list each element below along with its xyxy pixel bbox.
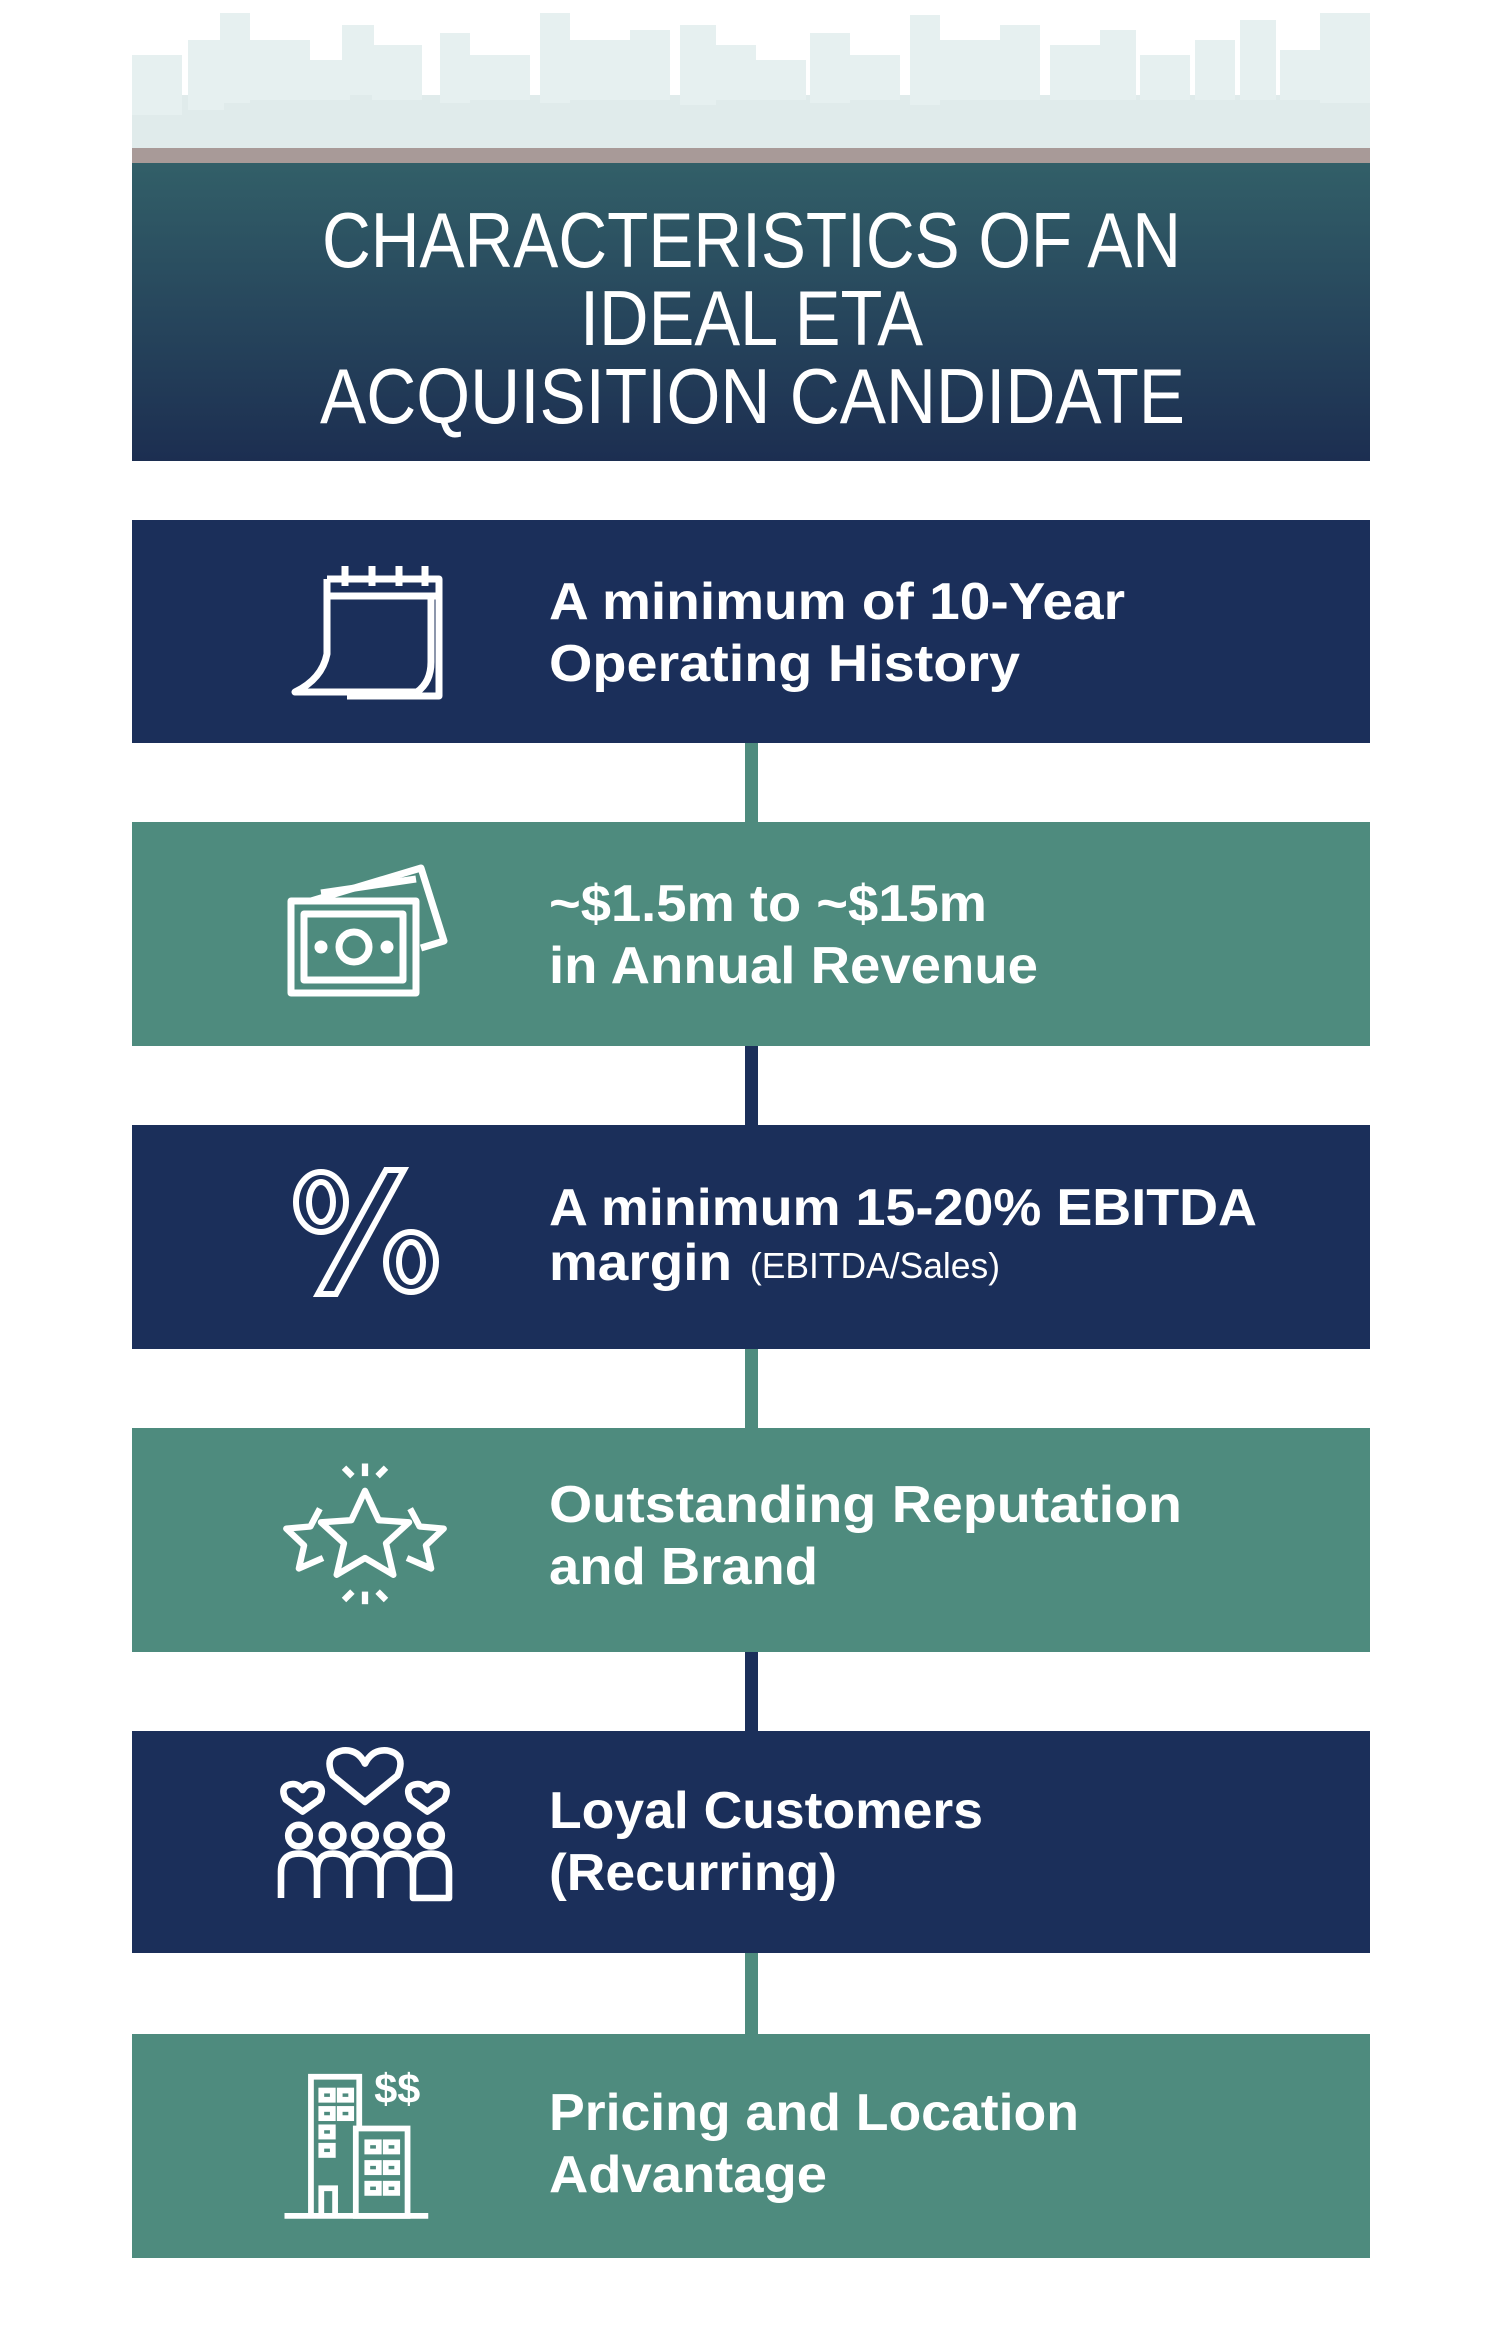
text: EBITDA margin: margin	[549, 1234, 732, 1292]
title box: IDEAL ETA	[580, 274, 923, 362]
icon: calendar	[295, 566, 439, 696]
panel: reputation	[132, 1428, 1370, 1652]
text: reputation	[549, 1476, 1182, 1596]
panel: operating history	[132, 520, 1370, 743]
text: operating history: A minimum of 10-Year	[549, 573, 1125, 631]
icon: money	[291, 868, 444, 993]
text: EBITDA margin: (EBITDA/Sales)	[750, 1245, 1000, 1286]
text: operating history	[549, 573, 1125, 693]
text: loyal customers: (Recurring)	[549, 1844, 837, 1902]
text: loyal customers: Loyal Customers	[549, 1782, 983, 1840]
text: pricing and location	[549, 2084, 1079, 2204]
panel: revenue	[132, 822, 1370, 1046]
panel: pricing and location	[132, 2034, 1370, 2258]
icon: stars	[286, 1464, 444, 1604]
text: reputation: and Brand	[549, 1538, 818, 1596]
text: operating history: Operating History	[549, 635, 1020, 693]
text: EBITDA margin: A minimum 15-20% EBITDA	[549, 1179, 1257, 1237]
text: revenue: in Annual Revenue	[549, 937, 1038, 995]
connectors	[745, 743, 758, 2034]
icon: percent	[296, 1170, 436, 1294]
text: pricing and location: Pricing and Location	[549, 2084, 1079, 2142]
text: EBITDA margin	[549, 1179, 1257, 1292]
title box	[132, 163, 1370, 461]
icon: people and hearts	[281, 1750, 449, 1898]
icon: building with dollars: $$	[374, 2066, 420, 2112]
panel: EBITDA margin	[132, 1125, 1370, 1349]
panel: loyal customers	[132, 1731, 1370, 1953]
text: revenue: ~$1.5m to ~$15m	[549, 875, 987, 933]
title box: ACQUISITION CANDIDATE	[320, 352, 1185, 440]
text: reputation: Outstanding Reputation	[549, 1476, 1182, 1534]
title box: CHARACTERISTICS OF AN	[322, 196, 1181, 284]
text: revenue	[549, 875, 1038, 995]
icon: building with dollars	[284, 2066, 428, 2216]
text: pricing and location: Advantage	[549, 2146, 827, 2204]
text: loyal customers	[549, 1782, 983, 1902]
skyline header	[132, 13, 1370, 163]
